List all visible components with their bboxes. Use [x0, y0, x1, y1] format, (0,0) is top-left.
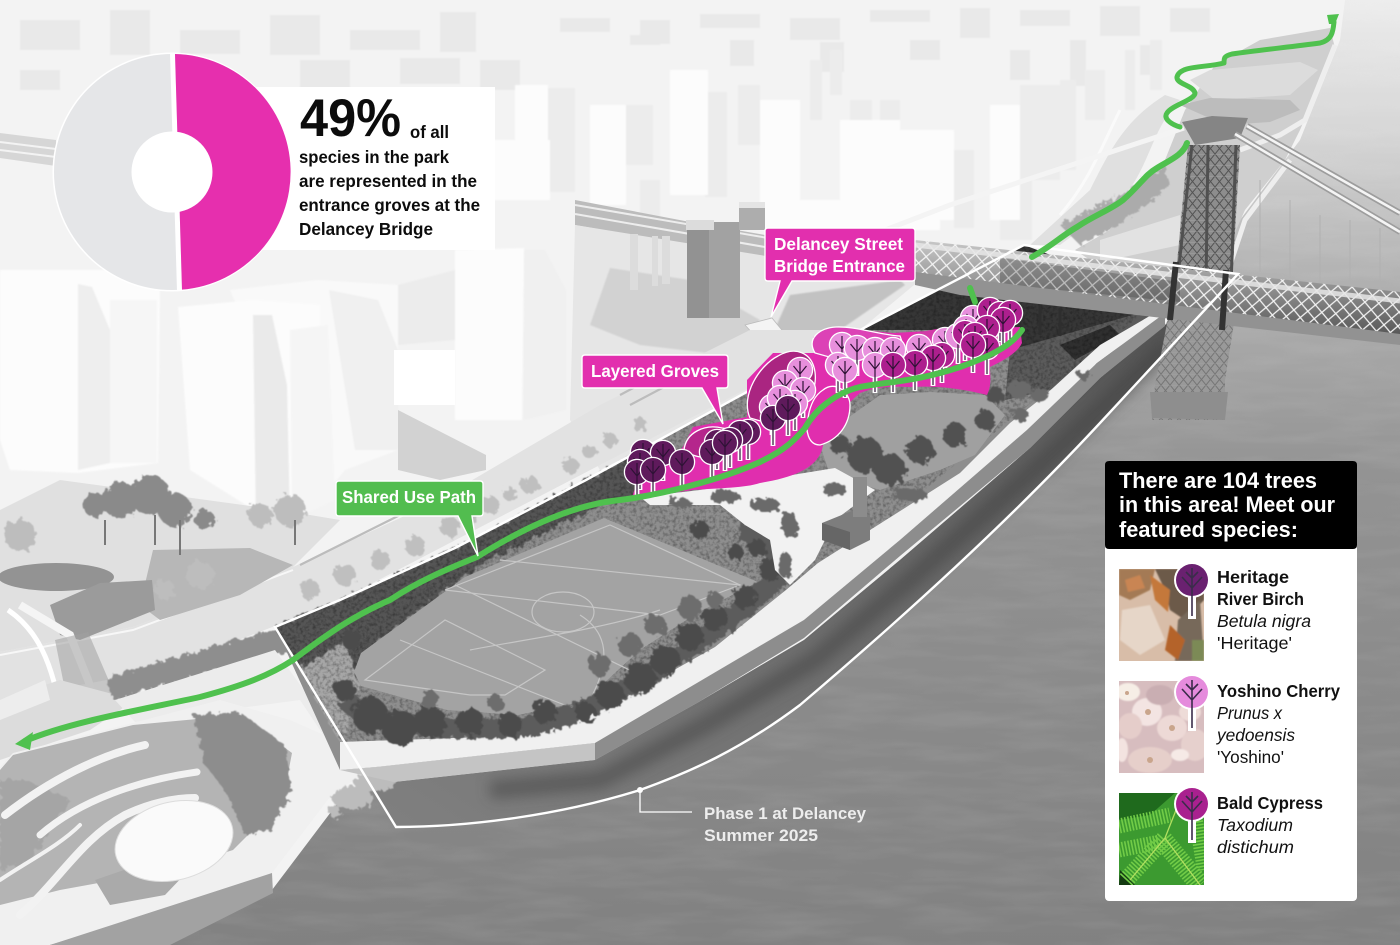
phase 1 label with leader: Summer 2025	[704, 826, 818, 845]
icon: bald cypress tree	[1174, 786, 1210, 843]
species label: yoshino cherry: Yoshino Cherry	[1217, 681, 1340, 701]
species label: heritage river birch: Betula nigra	[1217, 611, 1311, 631]
stat text: of all	[410, 122, 449, 142]
photo: river birch bark	[1119, 569, 1204, 661]
callout: Shared Use Path: Shared Use Path	[342, 487, 476, 507]
icon: yoshino cherry tree	[1174, 674, 1210, 731]
stat text	[299, 89, 480, 239]
sports field	[354, 518, 758, 715]
phase 1 darker water	[370, 274, 1238, 827]
park interior within phase 1	[275, 245, 1165, 770]
seawall	[340, 743, 595, 782]
distant city blocks	[20, 6, 1210, 90]
vegetation band around the field	[345, 530, 780, 729]
grove lobes	[747, 351, 815, 425]
species label: heritage river birch: River Birch	[1217, 589, 1304, 609]
far shore highway	[1030, 95, 1180, 245]
road along the park	[0, 330, 860, 700]
panel heading	[1105, 461, 1357, 549]
grove planting area	[632, 321, 1022, 497]
upper far park	[1075, 28, 1335, 310]
west park	[0, 480, 340, 652]
bridge tower and cables	[880, 116, 1400, 420]
panel heading: featured species:	[1119, 517, 1298, 542]
grove trees	[624, 297, 1023, 500]
icon: heritage river birch tree	[1174, 562, 1210, 619]
brick piers	[687, 222, 740, 318]
species label: yoshino cherry: 'Yoshino'	[1217, 747, 1284, 767]
donut chart: 49 percent	[52, 52, 292, 292]
footbridge arches	[20, 605, 130, 695]
photo: yoshino cherry blossoms	[1116, 681, 1209, 773]
callout: Delancey Street Bridge Entrance	[765, 228, 915, 317]
species label: yoshino cherry: yedoensis	[1216, 725, 1295, 745]
central lawn	[820, 392, 1005, 490]
panel: featured species	[1105, 461, 1357, 901]
path arrowheads	[15, 14, 1339, 750]
mid city towers	[460, 40, 1162, 240]
photo: bald cypress foliage	[1119, 793, 1204, 885]
shared use path	[25, 22, 1334, 741]
panel heading: There are 104 trees	[1119, 468, 1317, 493]
phase 1 boundary outline	[275, 245, 1238, 827]
tree band between road and south park	[110, 640, 285, 690]
foreground towers	[0, 248, 566, 525]
stat text: are represented in the	[299, 171, 477, 191]
species label: bald cypress: distichum	[1217, 837, 1294, 857]
entrance ramp	[745, 318, 800, 362]
phase 1 label with leader: Phase 1 at Delancey	[704, 804, 867, 823]
callout: Layered Groves: Layered Groves	[591, 361, 719, 381]
species label: yoshino cherry	[1216, 681, 1340, 767]
white path network	[640, 468, 875, 585]
species label: yoshino cherry: Prunus x	[1217, 703, 1283, 723]
greenery on road side	[300, 418, 647, 600]
callout: Delancey Street Bridge Entrance: Delancey Street	[774, 234, 903, 254]
callout: Shared Use Path	[336, 481, 483, 556]
species label: heritage river birch: Heritage	[1217, 567, 1289, 587]
promenade small trees	[1008, 370, 1092, 421]
bridge truss	[915, 240, 1400, 345]
stat text: Delancey Bridge	[299, 219, 433, 239]
callout: Delancey Street Bridge Entrance: Bridge Entrance	[774, 256, 905, 276]
species label: bald cypress: Taxodium	[1217, 815, 1293, 835]
left elevated road	[0, 133, 56, 166]
phase 1 label with leader	[637, 787, 867, 845]
under-bridge ground	[1005, 310, 1165, 400]
stat text: 49%	[300, 89, 401, 148]
species label: heritage river birch: 'Heritage'	[1217, 633, 1292, 653]
stat text: entrance groves at the	[299, 195, 480, 215]
species label: bald cypress: Bald Cypress	[1217, 793, 1323, 813]
amphitheatre terraces	[0, 745, 197, 915]
park trees around the field	[334, 521, 781, 746]
stat text: species in the park	[299, 147, 449, 167]
foliage texture over park	[275, 245, 1160, 742]
species label: bald cypress	[1217, 793, 1323, 857]
panel heading: in this area! Meet our	[1119, 492, 1335, 517]
rocks	[329, 773, 397, 818]
species label: heritage river birch	[1217, 567, 1311, 653]
historic building	[822, 477, 870, 550]
stat text backing panel	[250, 87, 495, 250]
callout: Layered Groves	[582, 355, 728, 424]
ground under the bridge approach	[570, 225, 920, 470]
south seawall	[50, 873, 273, 945]
promenade	[340, 310, 1165, 770]
south park lawn and promenade	[0, 700, 376, 945]
